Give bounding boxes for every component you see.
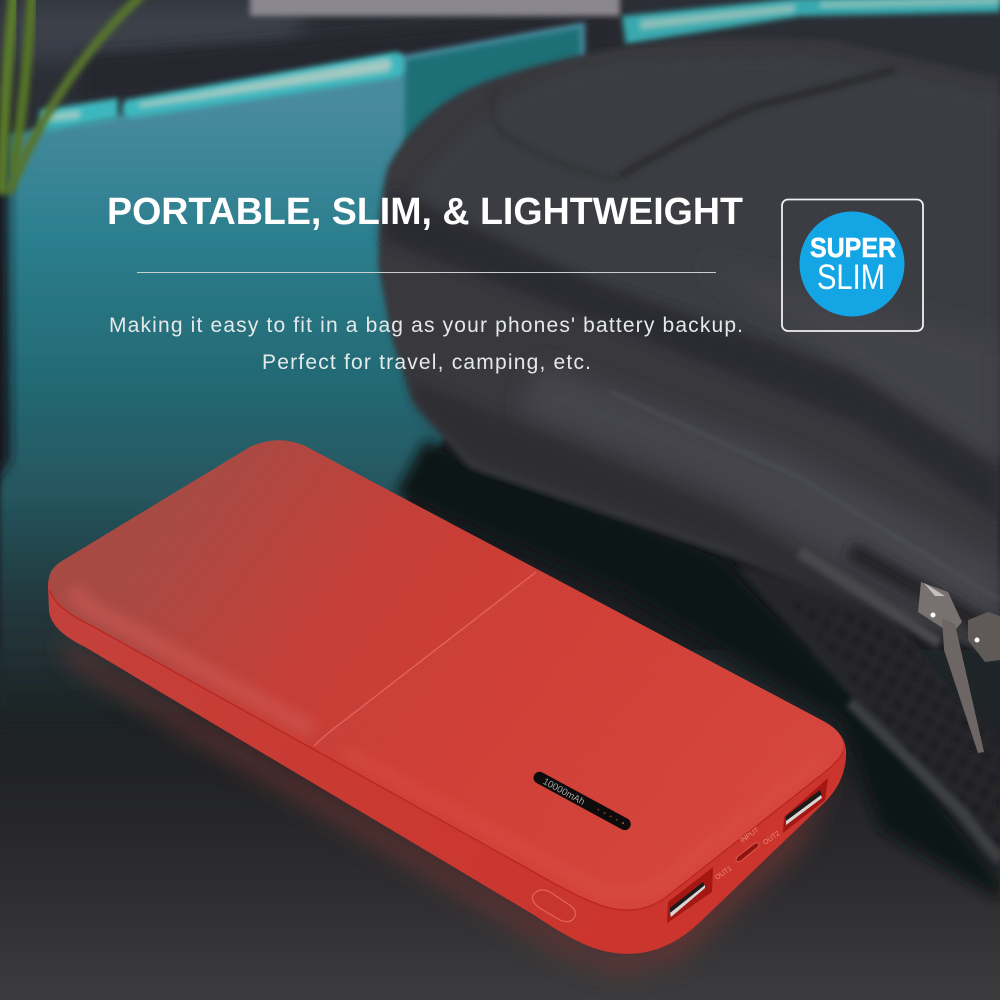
- badge frame: [782, 200, 923, 331]
- bag body: [378, 38, 1000, 660]
- port labels: OUT2: [762, 830, 782, 847]
- badge circle: [800, 212, 904, 316]
- capacity label: 10000mAh: [541, 776, 586, 808]
- bag upper strap: [800, 552, 940, 643]
- port labels: INPUT: [739, 826, 761, 845]
- red power bank: [48, 440, 846, 954]
- body text: Perfect for travel, camping, etc.: [262, 351, 591, 374]
- zipper pulls: [918, 582, 1000, 753]
- bag lighter stripe: [520, 365, 1000, 640]
- bag bottom strap: [850, 702, 1000, 860]
- badge: super slim: SLIM: [817, 258, 885, 297]
- divider line: [137, 272, 716, 273]
- reflected button: [530, 937, 569, 966]
- port labels: OUT1: [714, 865, 734, 882]
- USB port 2: [783, 778, 828, 833]
- port labels: [714, 826, 782, 882]
- bag mesh pocket: [735, 565, 1000, 870]
- micro USB input: [736, 843, 759, 862]
- grey laptop bag: [378, 38, 1000, 870]
- bag inner stitch outline: [492, 85, 620, 180]
- bag lower fold: [408, 378, 892, 640]
- power bank reflection: [55, 635, 835, 975]
- badge: super slim: [782, 200, 923, 331]
- front bevel highlight: [345, 752, 825, 893]
- bag zipper track: [850, 550, 1000, 635]
- rear panel bevel highlight: [72, 590, 312, 730]
- body text: Making it easy to fit in a bag as your phones' battery backup.: [109, 314, 743, 337]
- top face edge line: [50, 590, 843, 910]
- seam between panels: [314, 572, 536, 746]
- title: PORTABLE, SLIM, & LIGHTWEIGHT: [107, 191, 743, 233]
- black shadow under bag: [395, 440, 1000, 900]
- bag lighter lower-right panel: [700, 260, 1000, 465]
- LED display strip: [531, 770, 633, 833]
- teal reflective panels: [0, 0, 1000, 730]
- bag stitching line: [611, 392, 1000, 600]
- USB port 1: [667, 867, 713, 923]
- bag seam curve: [620, 70, 895, 176]
- table surface: [0, 650, 1000, 1000]
- power button: [532, 890, 575, 922]
- body text: [109, 314, 743, 374]
- bag dark band: [382, 190, 1000, 520]
- plant leaves: [2, 0, 142, 190]
- bag top panel: [410, 55, 1000, 460]
- power bank top face: [49, 440, 843, 910]
- weave texture on front half: [314, 570, 843, 910]
- power bank body and side: [48, 440, 846, 954]
- badge text: SUPER: [810, 232, 896, 263]
